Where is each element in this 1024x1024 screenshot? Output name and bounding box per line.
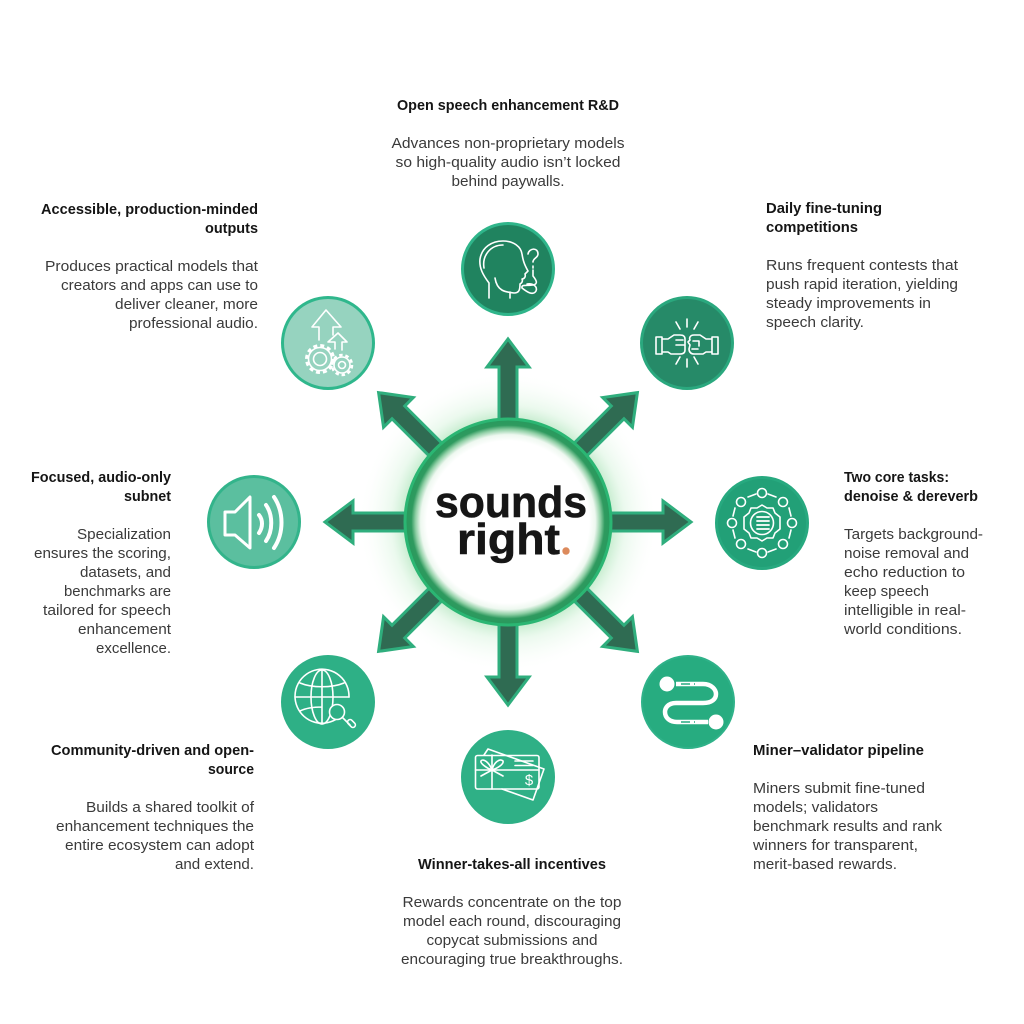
text: two core tasks: noise removal and [844, 545, 969, 562]
text: miner-validator pipeline: benchmark results and rank [753, 818, 942, 835]
icon: gears with arrows (production-minded) [282, 298, 374, 388]
text: open speech enhancement: so high-quality audio isn’t locked [396, 154, 620, 171]
text: miner-validator pipeline: models; validators [753, 799, 878, 816]
text: miner-validator pipeline: winners for transparent, [752, 837, 918, 854]
text: daily fine-tuning: push rapid iteration, yielding [766, 276, 958, 293]
text: daily fine-tuning [766, 200, 959, 331]
text: accessible outputs: Accessible, production-minded [41, 201, 258, 218]
text: open speech enhancement: Open speech enhancement R&D [397, 97, 619, 114]
text: daily fine-tuning: competitions [766, 219, 858, 236]
icon: head with question (open R&D) [462, 224, 554, 314]
text: winner-takes-all: model each round, discouraging [403, 913, 621, 930]
text: miner-validator pipeline: merit-based rewards. [753, 856, 897, 873]
text: community-driven: Community-driven and open- [51, 742, 254, 759]
text: accessible outputs: creators and apps can use to [61, 277, 258, 294]
arrow: up [487, 339, 529, 425]
arrow: upper left [364, 378, 454, 468]
icon: globe with magnifier (community) [282, 656, 374, 748]
text: two core tasks: denoise & dereverb [844, 488, 978, 505]
text: community-driven: entire ecosystem can adopt [65, 837, 255, 854]
text: two core tasks [843, 469, 983, 638]
text: open speech enhancement: behind paywalls. [452, 173, 564, 190]
icon: fist bump (daily competitions) [642, 298, 732, 388]
icon: gift cards (winner-takes-all) [462, 731, 554, 823]
arrow: down [487, 619, 529, 705]
text: focused audio-only: excellence. [96, 640, 171, 657]
text: two core tasks: echo reduction to [844, 564, 965, 581]
text: focused audio-only: enhancement [78, 621, 172, 638]
icon: gift cards (winner-takes-all): $ [525, 772, 534, 789]
center hub with logo [405, 419, 611, 625]
logo wordmark [435, 478, 587, 564]
icon: winding pipeline (miner-validator) [642, 656, 734, 748]
arrow: lower left [364, 576, 454, 666]
arrow: left [325, 501, 411, 543]
center glow [358, 372, 658, 672]
logo wordmark: right [457, 515, 560, 564]
text: focused audio-only: tailored for speech [43, 602, 171, 619]
arrow: right [605, 501, 691, 543]
text: winner-takes-all: Winner-takes-all incentives [418, 856, 606, 873]
text: focused audio-only: benchmarks are [64, 583, 171, 600]
text: focused audio-only: Specialization [77, 526, 171, 543]
text: miner-validator pipeline [752, 742, 942, 873]
logo wordmark: sounds [435, 478, 587, 527]
text: focused audio-only: Focused, audio-only [31, 469, 172, 486]
text: two core tasks: world conditions. [843, 621, 962, 638]
text: miner-validator pipeline: Miner–validator pipeline [753, 742, 924, 759]
text: daily fine-tuning: steady improvements in [766, 295, 931, 312]
text: two core tasks: intelligible in real- [844, 602, 966, 619]
text: two core tasks: Targets background- [844, 526, 983, 543]
text: accessible outputs: outputs [205, 220, 258, 237]
text: accessible outputs: professional audio. [129, 315, 258, 332]
text: winner-takes-all: encouraging true breakthroughs. [401, 951, 623, 968]
text: daily fine-tuning: Daily fine-tuning [766, 200, 882, 217]
text: winner-takes-all [401, 856, 623, 968]
icon: speaker (audio-only) [208, 476, 300, 568]
text: focused audio-only [31, 469, 172, 657]
text: focused audio-only: datasets, and [80, 564, 171, 581]
text: winner-takes-all: copycat submissions and [426, 932, 598, 949]
text: accessible outputs: deliver cleaner, more [115, 296, 258, 313]
text: winner-takes-all: Rewards concentrate on the top [402, 894, 622, 911]
text: miner-validator pipeline: Miners submit fine-tuned [753, 780, 925, 797]
text: focused audio-only: subnet [124, 488, 171, 505]
text: daily fine-tuning: Runs frequent contests that [766, 257, 959, 274]
text: accessible outputs [41, 201, 259, 332]
text: community-driven: Builds a shared toolkit of [86, 799, 255, 816]
text: open speech enhancement: Advances non-proprietary models [392, 135, 625, 152]
text: daily fine-tuning: speech clarity. [766, 314, 864, 331]
text: community-driven [51, 742, 255, 873]
text: open speech enhancement [392, 97, 625, 190]
text: two core tasks: keep speech [844, 583, 929, 600]
text: focused audio-only: ensures the scoring, [34, 545, 171, 562]
text: accessible outputs: Produces practical models that [45, 258, 259, 275]
arrow: lower right [562, 576, 652, 666]
arrow: upper right [562, 378, 652, 468]
text: two core tasks: Two core tasks: [844, 469, 949, 486]
text: community-driven: enhancement techniques the [56, 818, 254, 835]
text: community-driven: and extend. [175, 856, 254, 873]
icon: network gear (two core tasks) [716, 478, 808, 568]
text: community-driven: source [208, 761, 254, 778]
